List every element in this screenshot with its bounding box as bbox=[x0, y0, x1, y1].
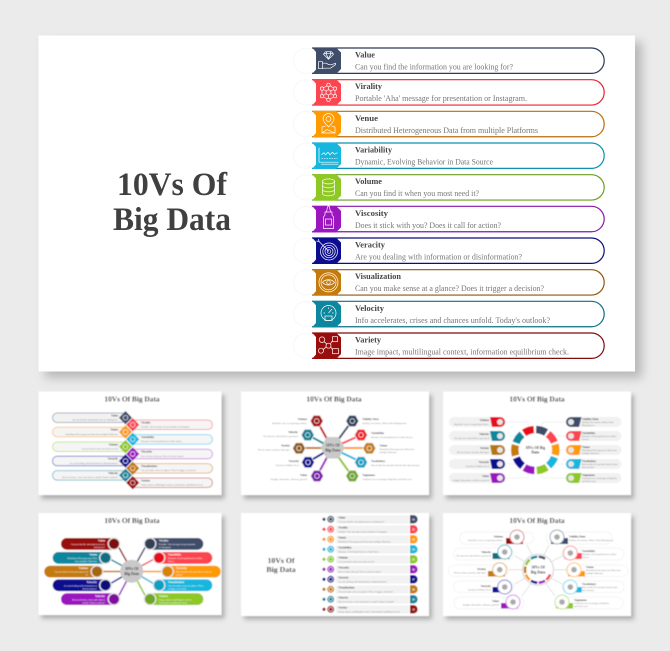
thumbnail: colored pills hub slide: Variability bbox=[168, 552, 182, 556]
thumbnail title: 10Vs Of Big Data bbox=[509, 516, 565, 525]
row: Volume bbox=[293, 174, 604, 201]
thumbnail: ring with tags slide: Veracity's Validity Check bbox=[466, 466, 490, 468]
thumbnail: list with title slide: Velocity bbox=[338, 596, 349, 600]
colored tab bbox=[312, 79, 341, 106]
thumbnail: radial circles slide: Diverse forms, structure data types bbox=[454, 572, 486, 574]
thumbnail: hexagon spokes slide: Vocabulary bbox=[371, 459, 386, 463]
icon: line chart bbox=[319, 148, 338, 164]
thumbnail: zigzag pills slide: Are you dealing with information or disinformation? bbox=[70, 462, 118, 465]
badge circle bbox=[293, 175, 319, 200]
main slide panel bbox=[38, 36, 642, 378]
thumbnail: zigzag pills slide: Venue bbox=[110, 428, 119, 432]
thumbnail: radial circles slide: Veracity bbox=[481, 584, 492, 588]
pill outline bbox=[312, 206, 604, 232]
thumbnail: hexagon spokes slide: Diverse forms, structure data types bbox=[258, 448, 290, 452]
thumbnail: ring with tags slide: Data bbox=[531, 450, 539, 454]
thumbnail: radial circles slide: Venue bbox=[586, 565, 594, 569]
thumbnail: colored pills hub slide: Velocity bbox=[95, 594, 106, 598]
thumbnail: colored pills hub slide: Veracity bbox=[87, 580, 98, 584]
thumbnail: ring with tags slide: Insights, Innovation, efficiency, growth bbox=[453, 479, 490, 482]
thumbnail: list with title slide: Portable 'Aha' message for presentation or Instagram. bbox=[338, 530, 388, 534]
thumbnail: list with title slide: Value bbox=[338, 516, 346, 520]
title: Big Data bbox=[113, 202, 231, 238]
colored tab bbox=[312, 48, 341, 74]
label: Variety bbox=[355, 334, 382, 344]
description: Distributed Heterogeneous Data from multiple Platforms bbox=[355, 125, 539, 135]
thumbnail: hexagon spokes slide: Quality, Governance, Master Data Management bbox=[362, 422, 407, 425]
title bbox=[113, 167, 231, 238]
thumbnail: list with title slide: Does it stick with you? Does it call for action? bbox=[338, 570, 381, 574]
thumbnail: colored pills hub slide bbox=[38, 513, 224, 618]
label: Velocity bbox=[355, 303, 385, 313]
thumbnail: ring with tags slide: Data models & semantics that describe bbox=[582, 464, 618, 466]
thumbnail: ring with tags slide: Dynamic, Evolving Behavior in Data bbox=[582, 435, 616, 438]
thumbnail title: 10Vs Of Big Data bbox=[509, 395, 565, 404]
thumbnail: ring with tags slide: 10Vs Of Big bbox=[525, 446, 545, 450]
thumbnail: list with title slide: 03 bbox=[412, 538, 416, 541]
thumbnail: colored pills hub slide: Can you find the information you are bbox=[71, 543, 105, 546]
thumbnail: zigzag pills slide: Visualization bbox=[141, 464, 158, 468]
pill outline bbox=[312, 143, 604, 168]
thumbnail title: 10Vs Of Big Data bbox=[104, 516, 160, 525]
thumbnail: zigzag pills slide: Volume bbox=[109, 442, 119, 446]
thumbnail: zigzag pills slide: Virality bbox=[141, 420, 151, 424]
row: Veracity bbox=[293, 238, 604, 264]
description: Dynamic, Evolving Behavior in Data Source bbox=[355, 156, 493, 166]
thumbnail: colored pills hub slide: Value bbox=[98, 538, 106, 542]
pill outline bbox=[312, 333, 604, 358]
row: Variability bbox=[293, 142, 604, 169]
thumbnail: radial circles slide: Variability bbox=[582, 549, 596, 553]
icon: target bbox=[316, 239, 338, 260]
thumbnail: hexagon spokes slide: Value bbox=[300, 473, 308, 477]
badge circle bbox=[293, 206, 319, 232]
thumbnail title: 10Vs Of Big Data bbox=[104, 395, 160, 404]
badge circle bbox=[293, 270, 319, 295]
description: Info accelerates, crises and chances unfold. Today's outlook? bbox=[355, 315, 550, 325]
thumbnail: zigzag pills slide: Can you find the information you are looking for? bbox=[72, 418, 118, 422]
row: Visualization bbox=[293, 269, 604, 296]
icon: eye in rings bbox=[319, 273, 338, 292]
thumbnail: ring with tags slide: Venue bbox=[582, 445, 590, 449]
thumbnail: colored pills hub slide: Big Data bbox=[124, 572, 139, 576]
thumbnail: radial circles slide: Confusion over meanings of Big Data bbox=[574, 602, 609, 605]
thumbnail: radial circles slide: and Tools used bbox=[574, 606, 589, 608]
thumbnail: list with title slide: 06 bbox=[412, 568, 416, 571]
thumbnail: ring with tags slide: Veracity bbox=[479, 460, 490, 464]
thumbnail: colored pills hub slide: from multiple Platforms bbox=[75, 560, 97, 563]
thumbnail: colored pills hub slide: it trigger a decision? bbox=[168, 588, 187, 590]
thumbnail: hexagon spokes slide: Big Data bbox=[325, 448, 340, 452]
thumbnail: list with title slide: Variety bbox=[338, 606, 348, 610]
thumbnail: list with title slide bbox=[241, 513, 432, 620]
thumbnail: radial circles slide: Science bbox=[582, 557, 589, 559]
colored tab bbox=[312, 332, 341, 359]
thumbnail: ring with tags slide: Vocabulary bbox=[582, 459, 597, 463]
colored tab bbox=[312, 269, 341, 296]
row: Venue bbox=[293, 111, 604, 137]
thumbnail: hexagon spokes slide: Vagueness bbox=[362, 473, 376, 477]
label: Veracity bbox=[355, 240, 386, 250]
thumbnail: hexagon spokes slide bbox=[241, 392, 432, 499]
thumbnail title: 10Vs Of Big Data bbox=[306, 395, 362, 404]
thumbnail: hexagon spokes slide: Validity Data bbox=[362, 417, 379, 421]
thumbnail: radial circles slide: multiple Platforms bbox=[586, 572, 603, 575]
thumbnail: list with title slide: Can you find it when you most need it? bbox=[338, 560, 375, 564]
thumbnail: ring with tags slide: Management bbox=[582, 424, 594, 427]
thumbnail: colored pills hub slide: Venue bbox=[89, 552, 98, 556]
thumbnail: hexagon spokes slide: Distributed Heterogeneous Data from bbox=[380, 448, 414, 451]
thumbnail: ring with tags slide: Big data's vast, ever-growing volume. bbox=[454, 423, 489, 426]
thumbnail: list with title slide: 04 bbox=[412, 548, 416, 551]
thumbnail: list with title slide: 09 bbox=[412, 598, 416, 601]
thumbnail: zigzag pills slide: Dynamic, Evolving Behavior in Data Source bbox=[141, 440, 182, 443]
thumbnail: list with title slide: Veracity bbox=[338, 576, 349, 580]
thumbnail: radial circles slide: Vagueness bbox=[574, 598, 588, 602]
icon: gauge bbox=[321, 306, 336, 321]
pill outline bbox=[312, 270, 604, 295]
thumbnail: list with title slide: Distributed Heterogeneous Data from multiple Platforms bbox=[338, 540, 391, 544]
description: Image impact, multilingual context, information equilibrium check. bbox=[355, 346, 569, 356]
thumbnail: zigzag pills slide: Can you find it when you most need it? bbox=[82, 448, 118, 450]
thumbnail: list with title slide: Info accelerates, crises and chances unfold. Today's outlook? bbox=[338, 600, 394, 604]
row: Value bbox=[293, 48, 604, 74]
thumbnail: hexagon spokes slide: Volume bbox=[298, 417, 308, 421]
description: Portable 'Aha' message for presentation or Instagram. bbox=[355, 93, 527, 103]
thumbnail: hexagon spokes slide: 10Vs Of bbox=[326, 442, 340, 448]
thumbnail: radial circles slide: The Speed at which Data is generated bbox=[456, 554, 492, 558]
thumbnail: hexagon spokes slide: Data models & semantics that describe data structure bbox=[371, 465, 420, 467]
thumbnail: colored pills hub slide: Portable 'Aha' message for presentation bbox=[159, 543, 196, 546]
thumbnail: radial circles slide: Insights, Innovation, efficiency, growth bbox=[463, 604, 500, 606]
pill outline bbox=[312, 48, 604, 73]
thumbnail: hexagon spokes slide: Confusion over meanings of Big Data and Tools used bbox=[362, 478, 412, 481]
icon: map pin bbox=[322, 114, 335, 133]
thumbnail: colored pills hub slide: Variety bbox=[159, 594, 169, 598]
thumbnail: colored pills hub slide: Visualization bbox=[168, 580, 185, 584]
description: Are you dealing with information or disinformation? bbox=[355, 252, 522, 262]
thumbnail: radial circles slide bbox=[443, 513, 634, 620]
icon: connected shapes bbox=[318, 337, 338, 354]
thumbnail: radial circles slide: Volume bbox=[494, 534, 504, 538]
icon: network bbox=[320, 83, 337, 102]
thumbnail: ring with tags slide: Vagueness bbox=[582, 473, 596, 477]
thumbnail: list with title slide: Are you dealing with information or disinformation? bbox=[338, 580, 387, 584]
description: Can you find the information you are looking for? bbox=[355, 62, 513, 72]
label: Volume bbox=[355, 176, 382, 186]
thumbnail: radial circles slide: Veracity's Validity Check bbox=[468, 590, 492, 592]
thumbnail: list with title slide: 05 bbox=[412, 558, 416, 561]
badge circle bbox=[293, 143, 319, 168]
thumbnail: list with title slide: Visualization bbox=[338, 586, 355, 590]
colored tab bbox=[312, 174, 341, 201]
thumbnail: radial circles slide: 10Vs Of bbox=[531, 566, 545, 570]
thumbnail: colored pills hub slide: unfold. Today's outlook? bbox=[82, 601, 105, 604]
thumbnail: list with title slide: Variability bbox=[338, 546, 352, 550]
thumbnail: hexagon spokes slide: Dynamic, Evolving Behavior in Data Science bbox=[371, 436, 413, 439]
description: Does it stick with you? Does it call for action? bbox=[355, 220, 501, 230]
thumbnail: ring with tags slide: and Tools used bbox=[582, 481, 597, 483]
thumbnail: colored pills hub slide: Are you dealing with information or bbox=[64, 584, 97, 588]
label: Value bbox=[355, 50, 375, 60]
thumbnail: hexagon spokes slide: Variety bbox=[281, 444, 291, 448]
thumbnail: ring with tags slide: multiple Platforms bbox=[582, 452, 599, 455]
thumbnail: colored pills hub slide: Dynamic, Evolving Behavior in Data bbox=[168, 557, 202, 560]
thumbnail: list with title slide: Can you find the information you are looking for? bbox=[338, 520, 384, 524]
title: 10Vs Of bbox=[117, 167, 228, 203]
thumbnail: radial circles slide: Big Data bbox=[531, 570, 545, 574]
thumbnail: zigzag pills slide: Velocity bbox=[108, 471, 119, 475]
thumbnail: colored pills hub slide: Volume bbox=[79, 566, 89, 570]
colored tab bbox=[312, 142, 341, 169]
thumbnail: radial circles slide: Data models & semantics that describe bbox=[582, 587, 618, 589]
thumbnail: ring with tags slide: Volume bbox=[480, 418, 490, 422]
row: Velocity bbox=[293, 301, 604, 327]
description: Can you find it when you most need it? bbox=[355, 188, 479, 198]
pill outline bbox=[312, 301, 604, 327]
badge circle bbox=[293, 238, 319, 263]
label: Viscosity bbox=[355, 208, 389, 218]
thumbnail: colored pills hub slide: Viscosity bbox=[176, 566, 188, 570]
thumbnail: ring with tags slide: Validity Data bbox=[582, 417, 599, 421]
thumbnail: zigzag pills slide: Viscosity bbox=[141, 450, 153, 454]
thumbnail: colored pills hub slide: it? bbox=[86, 575, 88, 577]
thumbnail: radial circles slide: Vocabulary bbox=[582, 582, 597, 586]
thumbnail: colored pills hub slide: 10Vs Of bbox=[125, 567, 139, 571]
thumbnail: ring with tags slide: Distributed Heterogeneous Data from bbox=[582, 449, 617, 452]
thumbnail: zigzag pills slide: Value bbox=[111, 413, 119, 417]
thumbnail: zigzag pills slide bbox=[38, 392, 224, 499]
thumbnail: ring with tags slide: Variety bbox=[480, 446, 490, 450]
center hexagon bbox=[321, 437, 345, 458]
thumbnail: colored pills hub slide: action? bbox=[176, 575, 183, 577]
description: Can you make sense at a glance? Does it trigger a decision? bbox=[355, 283, 544, 293]
thumbnail: radial circles slide: Quality, Governance, Master Data Management bbox=[569, 539, 613, 542]
thumbnail title bbox=[266, 556, 296, 574]
icon: database bbox=[322, 179, 334, 196]
thumbnail: hexagon spokes slide: Veracity bbox=[289, 459, 300, 463]
pill outline bbox=[312, 238, 604, 263]
pill outline bbox=[312, 111, 604, 137]
thumbnail: list with title slide: Viscosity bbox=[338, 566, 350, 570]
thumbnail: zigzag pills slide: Can you make sense at a glance? Does it trigger a decision? bbox=[141, 469, 196, 472]
thumbnail: list with title slide: 02 bbox=[412, 528, 416, 531]
thumbnail: colored pills hub slide: Distributed Heterogeneous Data bbox=[67, 557, 97, 560]
center circle bbox=[120, 560, 143, 583]
center ring bbox=[522, 554, 554, 585]
colored tab bbox=[312, 206, 341, 232]
thumbnail: zigzag pills slide: Portable 'Aha' message for presentation or Instagram. bbox=[141, 426, 191, 428]
row: Viscosity bbox=[293, 206, 604, 232]
thumbnail: hexagon spokes slide: Variability bbox=[371, 431, 385, 435]
thumbnail: colored pills hub slide: Does it stick with you? Does it call for bbox=[176, 571, 212, 574]
thumbnail: radial circles slide: Velocity bbox=[481, 550, 492, 554]
thumbnail: radial circles slide: Variety bbox=[477, 567, 487, 571]
thumbnail: radial circles slide: Dynamic, Evolving Behavior in Data bbox=[582, 553, 616, 556]
thumbnail: colored pills hub slide: looking for? bbox=[94, 546, 105, 549]
thumbnail: radial circles slide: Big data's vast, ever-growing volume. bbox=[468, 539, 503, 542]
label: Variability bbox=[355, 144, 393, 154]
thumbnail: ring with tags slide: data structure bbox=[582, 467, 594, 469]
thumbnail: ring with tags slide: Diverse forms, structure data types bbox=[457, 451, 489, 454]
icon: diamond in hand bbox=[318, 52, 336, 69]
thumbnail: list with title slide: Venue bbox=[338, 536, 347, 540]
label: Venue bbox=[355, 113, 378, 123]
thumbnail: hexagon spokes slide: Velocity bbox=[288, 430, 299, 434]
pill outline bbox=[312, 80, 604, 105]
thumbnail: colored pills hub slide: Image impact, multilingual context, bbox=[159, 598, 192, 601]
thumbnail: ring with tags slide: Science bbox=[582, 439, 589, 441]
thumbnail: zigzag pills slide: Variety bbox=[141, 478, 151, 482]
thumbnail: colored pills hub slide: or Instagram. bbox=[159, 546, 172, 549]
thumbnail: list with title slide: 08 bbox=[412, 588, 416, 591]
thumbnail: radial circles slide: Value bbox=[492, 599, 500, 603]
label: Virality bbox=[355, 81, 383, 91]
thumbnail title: 10Vs Of bbox=[267, 556, 295, 565]
thumbnail: zigzag pills slide: Does it stick with you? Does it call for action? bbox=[141, 455, 184, 458]
badge circle bbox=[293, 333, 319, 358]
thumbnail: colored pills hub slide: Virality bbox=[159, 538, 169, 542]
thumbnail: hexagon spokes slide: multiple Platforms bbox=[380, 451, 397, 454]
thumbnail: zigzag pills slide: Variability bbox=[141, 435, 155, 439]
thumbnail: ring with tags slide bbox=[443, 392, 634, 499]
thumbnail: list with title slide: 10 bbox=[412, 608, 416, 611]
thumbnail: zigzag pills slide: Veracity bbox=[108, 457, 119, 461]
badge circle bbox=[293, 111, 319, 137]
thumbnail: ring with tags slide: Variability bbox=[582, 431, 596, 435]
thumbnail: radial circles slide: data structure bbox=[582, 590, 594, 592]
thumbnail: colored pills hub slide: Can you find it when you most need bbox=[55, 571, 89, 574]
colored tab bbox=[312, 111, 341, 137]
colored tab bbox=[312, 238, 341, 264]
segmented ring bbox=[507, 421, 564, 479]
thumbnail: ring with tags slide: Value bbox=[482, 474, 490, 478]
thumbnail: colored pills hub slide: Info accelerates, crises and chances bbox=[72, 598, 105, 601]
badge circle bbox=[293, 80, 319, 105]
thumbnail: list with title slide: Dynamic, Evolving Behavior in Data Source bbox=[338, 550, 380, 554]
label: Visualization bbox=[355, 271, 401, 281]
thumbnail: zigzag pills slide: Image impact, multilingual context, information equilibrium check. bbox=[141, 484, 203, 486]
thumbnail: list with title slide: Can you make sense at a glance? Does it trigger a decision? bbox=[338, 590, 393, 594]
thumbnail: colored pills hub slide: information equilibrium check. bbox=[159, 601, 188, 604]
thumbnail: zigzag pills slide: Info accelerates, crises and chances unfold. Today's outlook? bbox=[62, 476, 118, 479]
thumbnail: ring with tags slide: Quality, Governance, Master Data bbox=[582, 422, 613, 424]
thumbnail: radial circles slide: Distributed Heterogeneous Data from bbox=[586, 569, 621, 572]
row: Variety bbox=[293, 332, 604, 359]
thumbnail: ring with tags slide: Confusion over meanings of Big Data bbox=[582, 477, 617, 480]
colored tab bbox=[312, 301, 341, 327]
thumbnail: list with title slide: Volume bbox=[338, 556, 348, 560]
row: Virality bbox=[293, 79, 604, 106]
thumbnail: radial circles slide: Validity Data bbox=[569, 534, 586, 538]
thumbnail: ring with tags slide: Velocity bbox=[479, 432, 490, 436]
icon: glue bottle bbox=[324, 206, 334, 229]
thumbnail: list with title slide: 07 bbox=[412, 578, 416, 581]
thumbnail: hexagon spokes slide: The Speed at which Data is generated bbox=[263, 435, 299, 438]
pill outline bbox=[312, 175, 604, 200]
thumbnail: list with title slide: Image impact, multilingual context, information equilibrium check. bbox=[338, 610, 401, 614]
thumbnail title: Big Data bbox=[266, 565, 296, 574]
thumbnail: zigzag pills slide: Distributed Heterogeneous Data from multiple Platforms bbox=[66, 433, 118, 436]
badge circle bbox=[293, 48, 319, 73]
thumbnail: colored pills hub slide: Can you make sense at a glance? Does bbox=[168, 584, 204, 588]
thumbnail: colored pills hub slide: disinformation? bbox=[82, 588, 97, 590]
thumbnail: hexagon spokes slide: Insights, Innovation, efficiency, growth bbox=[271, 478, 308, 481]
thumbnail: hexagon spokes slide: Veracity's Validity Check bbox=[276, 465, 300, 467]
thumbnail: list with title slide: 01 bbox=[412, 518, 416, 521]
thumbnail: hexagon spokes slide: Big data's vast, ever-growing volume. bbox=[272, 422, 307, 425]
thumbnail: colored pills hub slide: Source bbox=[168, 561, 174, 563]
thumbnail: list with title slide: Virality bbox=[338, 526, 348, 530]
badge circle bbox=[293, 301, 319, 327]
thumbnail: hexagon spokes slide: Venue bbox=[380, 444, 388, 448]
thumbnail: ring with tags slide: The Speed at which Data is generated bbox=[454, 437, 490, 440]
